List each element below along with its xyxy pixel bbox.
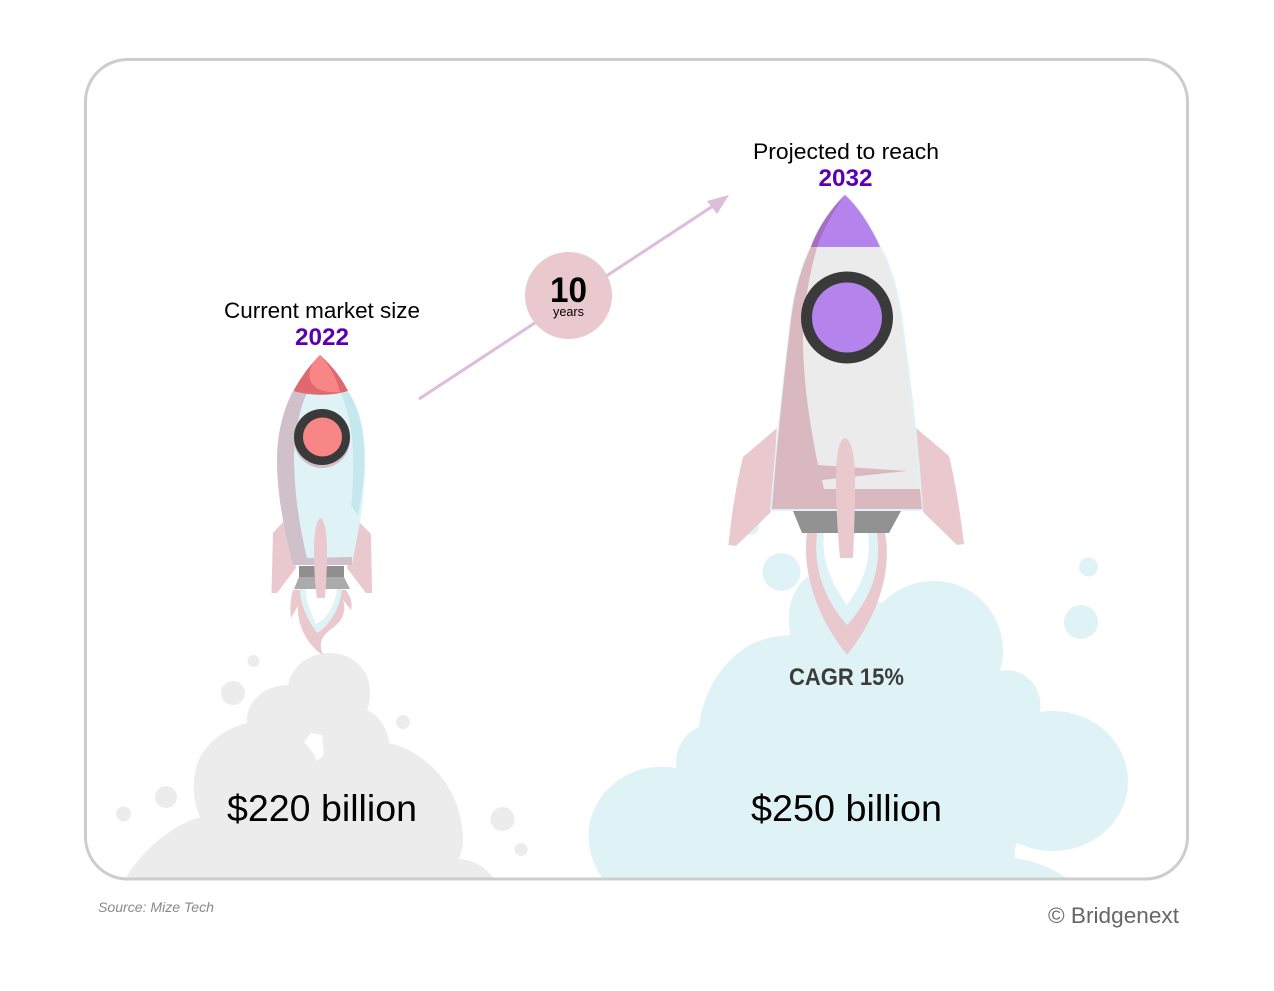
heading: projected to reach	[753, 139, 939, 192]
small rocket	[272, 355, 372, 655]
arrow: 10 year growth	[419, 195, 729, 399]
window: small rocket	[294, 409, 350, 468]
flame: small rocket	[290, 589, 352, 655]
nose cone: small rocket	[294, 355, 348, 395]
fins: large rocket	[728, 428, 964, 546]
copyright: © Bridgenext	[1048, 903, 1179, 928]
label: CAGR: CAGR 15%	[789, 664, 904, 691]
heading: current market size	[224, 298, 420, 351]
heading: current market size: 2022	[295, 324, 349, 351]
body highlight: small rocket	[341, 392, 364, 515]
flame: large rocket	[806, 533, 887, 655]
heading: projected to reach: Projected to reach	[753, 139, 939, 164]
center fin: small rocket	[314, 518, 327, 598]
body: large rocket	[771, 195, 922, 510]
heading: current market size: Current market size	[224, 298, 420, 323]
fins: small rocket	[272, 522, 372, 593]
value: 250 billion: $250 billion	[751, 788, 942, 829]
body shadow: large rocket	[772, 247, 922, 509]
large rocket	[728, 195, 964, 655]
body: small rocket	[277, 391, 365, 565]
smoke cloud: blue	[588, 519, 1128, 878]
center fin: large rocket	[836, 438, 855, 558]
engine: small rocket	[294, 566, 350, 589]
panel: frame	[86, 60, 1188, 879]
source: Source: Mize Tech	[98, 899, 214, 915]
badge: 10 years	[525, 252, 612, 339]
value: 220 billion: $220 billion	[227, 788, 417, 829]
smoke cloud: grey	[116, 653, 528, 878]
engine: large rocket	[793, 511, 901, 533]
badge: 10 years: 10	[550, 271, 587, 310]
nose cone: large rocket	[811, 195, 880, 247]
heading: projected to reach: 2032	[818, 165, 872, 192]
badge: 10 years: years	[553, 305, 584, 319]
window: large rocket	[801, 272, 893, 364]
body shadow: small rocket	[277, 391, 352, 565]
